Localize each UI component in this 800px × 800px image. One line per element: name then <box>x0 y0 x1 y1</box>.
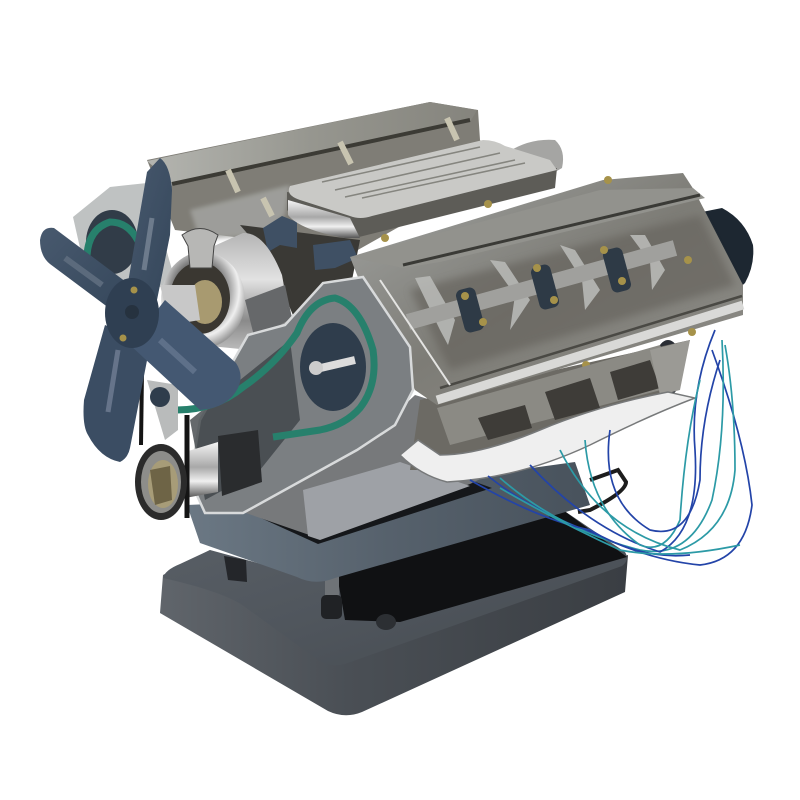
chrome exhaust manifold <box>400 392 695 482</box>
gold screws <box>381 176 696 407</box>
cover body <box>350 173 743 405</box>
rocker shaft <box>408 248 675 322</box>
fan blade up <box>125 158 172 310</box>
cover top dark line <box>403 195 700 265</box>
rocker arms <box>415 235 665 345</box>
rear bank reflection <box>190 185 290 240</box>
rear black cable loop <box>578 470 626 512</box>
intake chrome corner <box>288 200 360 238</box>
front cylinder bank <box>350 173 743 407</box>
chrome crank shaft <box>185 442 218 498</box>
cover lower rail <box>437 305 743 400</box>
left timing cover <box>73 183 175 310</box>
rocker clamps <box>455 246 632 334</box>
timing gear <box>300 323 366 411</box>
base screw dot <box>376 614 396 630</box>
lower engine body <box>410 340 690 470</box>
fan <box>40 158 241 462</box>
rear bank spark posts <box>228 118 457 216</box>
fan blade right <box>130 300 241 410</box>
intake top <box>289 140 557 218</box>
intake front face <box>287 168 557 238</box>
radiator cap <box>182 228 218 268</box>
crankcase backdrop <box>243 395 560 538</box>
dark collar <box>218 430 262 496</box>
grey tray under engine <box>187 462 590 582</box>
rear cylinder bank <box>147 102 500 260</box>
left gear <box>86 210 138 274</box>
chrome intake manifold <box>287 140 557 238</box>
intake ribs <box>322 147 525 198</box>
support foot left <box>224 556 247 582</box>
spark plug wires <box>470 330 752 565</box>
timing belt cover <box>177 277 413 513</box>
blue brackets <box>263 216 358 270</box>
display stand base <box>160 510 628 715</box>
base shadow area <box>337 510 627 622</box>
timing belt <box>177 298 374 437</box>
rear bank rail <box>172 120 470 184</box>
dark rear motor <box>702 208 753 292</box>
crank pulley <box>135 444 187 520</box>
exhaust pipe behind intake <box>508 140 563 175</box>
pulley disc <box>161 252 245 348</box>
sump <box>303 462 470 540</box>
rear bank top cover <box>147 102 477 186</box>
cover top panel <box>350 188 705 268</box>
rear bank body <box>147 102 500 260</box>
fan hub <box>105 278 159 348</box>
alternator cylinder <box>200 233 290 350</box>
fan blade down <box>84 325 150 462</box>
fan support bracket <box>147 380 178 440</box>
dark engine gap <box>240 225 360 320</box>
base top face <box>163 510 627 665</box>
left timing belt <box>87 222 140 265</box>
base side faces <box>160 550 628 715</box>
lower cylinder valves <box>437 340 690 445</box>
cover dark interior <box>410 215 735 370</box>
cover dark lower area <box>190 340 300 500</box>
fan belts <box>141 372 187 518</box>
rear lower disc <box>654 340 682 396</box>
cover left edge <box>380 280 450 385</box>
fan blade left <box>40 228 130 320</box>
support post centre <box>321 576 342 619</box>
chrome alternator pulley <box>160 228 292 350</box>
